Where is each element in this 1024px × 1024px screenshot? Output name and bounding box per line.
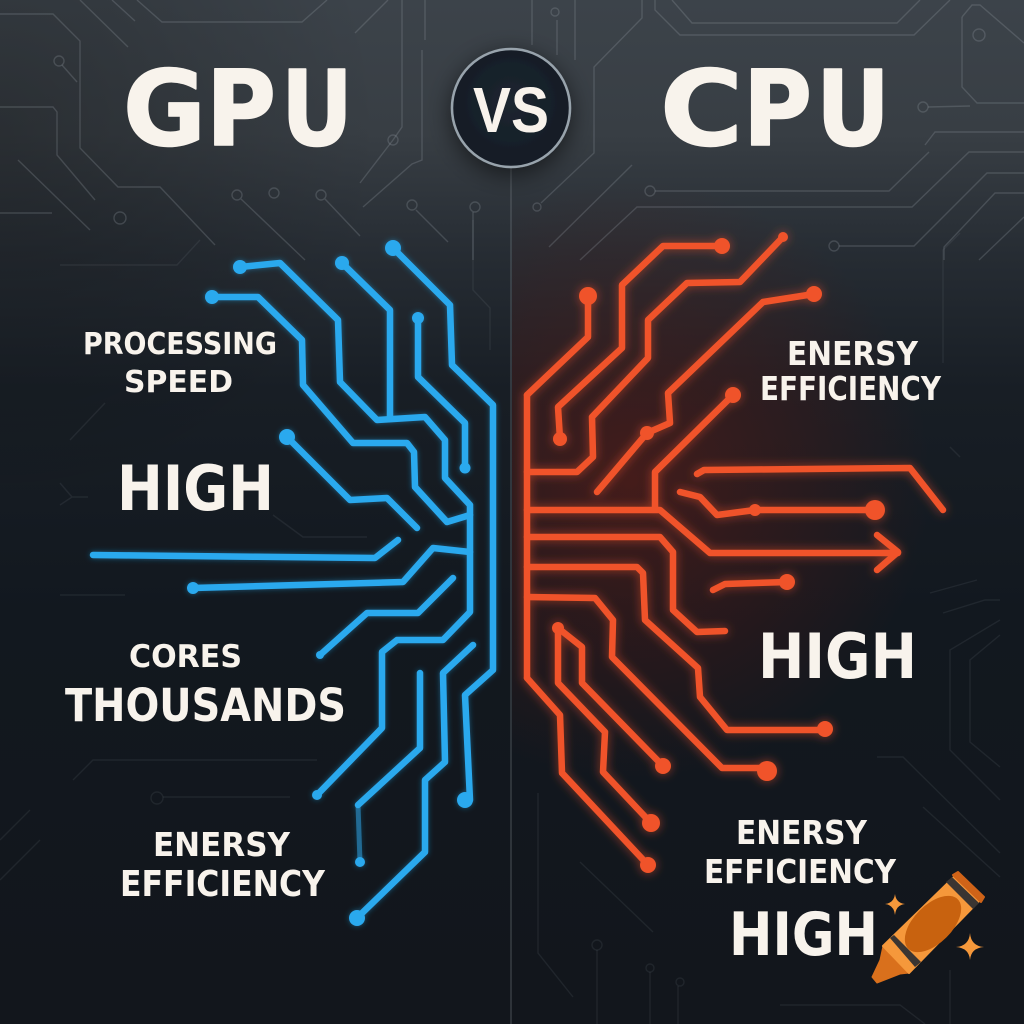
title: GPU: G bbox=[123, 48, 206, 170]
icon: large sparkle bbox=[956, 933, 984, 960]
GPU label: cores thousands bbox=[65, 639, 346, 732]
GPU label: cores thousands: CORES bbox=[129, 639, 242, 675]
title: CPU: C bbox=[660, 48, 743, 170]
GPU label: processing speed bbox=[83, 327, 277, 400]
GPU label: energy efficiency: ENERSY bbox=[153, 825, 291, 864]
title: GPU: P bbox=[206, 48, 276, 170]
CPU label: energy efficiency lower: EFFICIENCY bbox=[704, 852, 897, 891]
GPU label: energy efficiency: EFFICIENCY bbox=[120, 864, 326, 905]
background circuit pattern: top bbox=[0, 0, 1024, 260]
VS badge: VS bbox=[473, 74, 549, 146]
left vignette bbox=[0, 0, 400, 520]
title: CPU: U bbox=[816, 48, 890, 170]
background circuit pattern: lower bbox=[0, 220, 1000, 1024]
CPU label: energy efficiency lower: ENERSY bbox=[736, 813, 868, 852]
GPU circuit traces bbox=[93, 240, 493, 926]
title: GPU: U bbox=[281, 48, 353, 170]
VS badge bbox=[452, 49, 570, 167]
GPU label: processing speed: SPEED bbox=[124, 365, 233, 400]
GPU value: high: HIGH bbox=[117, 452, 274, 525]
GPU label: processing speed: PROCESSING bbox=[83, 327, 277, 362]
CPU value: high: HIGH bbox=[758, 620, 917, 693]
title: CPU: P bbox=[743, 48, 812, 170]
GPU label: energy efficiency bbox=[120, 825, 326, 905]
CPU value: high lower: HIGH bbox=[729, 900, 878, 970]
GPU label: cores thousands: THOUSANDS bbox=[65, 679, 346, 732]
center divider line bbox=[510, 165, 512, 1024]
CPU label: energy efficiency lower bbox=[704, 813, 897, 891]
title: GPU bbox=[123, 48, 353, 170]
red glow behind CPU traces bbox=[512, 180, 1024, 820]
CPU label: energy efficiency: ENERSY bbox=[787, 334, 919, 373]
icon: small sparkle bbox=[885, 894, 905, 915]
CPU label: energy efficiency bbox=[760, 334, 942, 408]
CPU circuit traces bbox=[527, 232, 943, 873]
title: CPU bbox=[660, 48, 890, 170]
icon: crayon bbox=[872, 872, 984, 983]
CPU label: energy efficiency: EFFICIENCY bbox=[760, 369, 942, 408]
